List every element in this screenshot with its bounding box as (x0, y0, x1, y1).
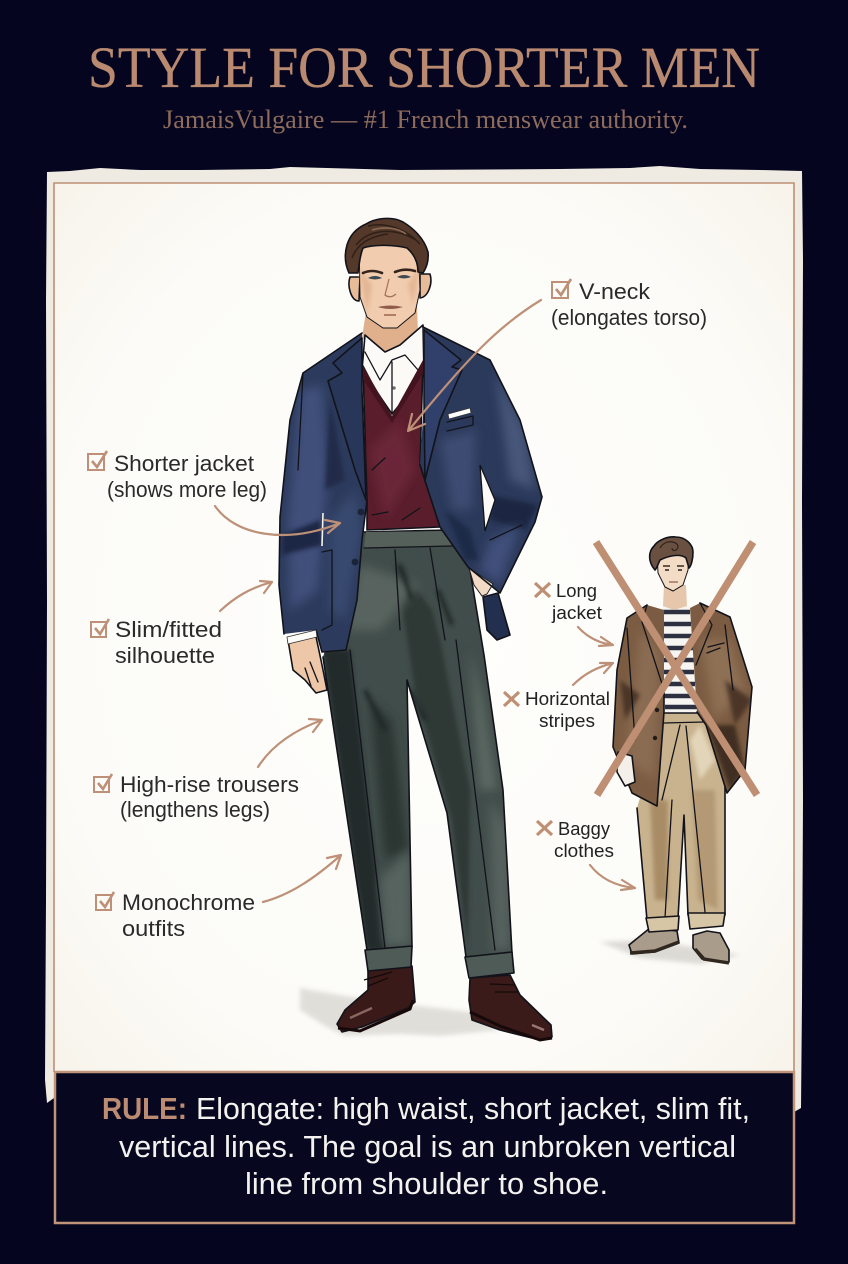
brown long coat (613, 603, 752, 806)
annotation: Monochrome outfits: Monochrome (122, 890, 255, 915)
annotation: Slim/fitted: Slim/fitted (115, 617, 222, 642)
rule text: Elongate: high waist, short jacket, slim fit, (196, 1091, 750, 1126)
annotation: Long jacket: jacket (551, 602, 602, 623)
annotation: High-rise trousers (94, 719, 322, 822)
rule text: RULE: (102, 1091, 187, 1126)
paper inner frame (54, 183, 794, 1072)
annotation: High-rise trousers: High-rise trousers (120, 772, 299, 797)
khaki trousers (637, 713, 725, 932)
arrow (263, 855, 341, 902)
arrow (215, 506, 340, 535)
gap between arm and body (480, 465, 495, 531)
neck and head (345, 218, 431, 365)
arrow (408, 300, 541, 431)
big cross-out X (596, 542, 757, 795)
annotation: High-rise trousers: (lengthens legs) (120, 797, 270, 822)
left shoe (337, 966, 415, 1032)
striped shirt (663, 606, 697, 712)
title: STYLE FOR SHORTER MEN (88, 35, 760, 100)
small figure: poorly dressed man (596, 537, 757, 964)
annotation: Long jacket (535, 580, 613, 646)
rule text: line from shoulder to shoe. (245, 1166, 608, 1201)
lapels (328, 338, 366, 500)
annotation: Horizontal stripes: stripes (539, 710, 595, 731)
sleeve seams (298, 373, 522, 630)
annotation: Long jacket: Long (556, 580, 597, 601)
shirt cuff and hand at pocket (469, 568, 493, 596)
small figure hand (617, 752, 635, 786)
annotation: Shorter jacket: Shorter jacket (114, 451, 255, 476)
arrow (220, 581, 272, 611)
annotation: Horizontal stripes (504, 663, 613, 731)
annotation: V-neck: V-neck (579, 279, 651, 304)
pocket square (448, 408, 471, 419)
annotation: Baggy clothes: Baggy (558, 818, 611, 839)
annotation: Monochrome outfits (96, 855, 341, 941)
blazer right side and sleeve (420, 327, 542, 593)
annotation: Horizontal stripes: Horizontal (525, 688, 610, 709)
annotation: Shorter jacket (88, 451, 340, 535)
annotation: Baggy clothes: clothes (554, 840, 614, 861)
small figure shoes (629, 928, 729, 963)
arrow (573, 663, 613, 685)
rule text: vertical lines. The goal is an unbroken vertical (119, 1129, 736, 1164)
panel: torn paper (45, 166, 803, 1112)
facial features (363, 270, 415, 273)
annotation: Slim/fitted (91, 581, 272, 668)
small figure head (650, 537, 693, 610)
trousers (323, 530, 514, 978)
subtitle: JamaisVulgaire — #1 French menswear authority. (163, 105, 688, 134)
ears (349, 274, 431, 301)
navy blazer (279, 327, 542, 652)
panel: rule (55, 1072, 794, 1223)
face (359, 240, 420, 328)
left hand and cuff (287, 630, 327, 693)
small figure shadow (600, 940, 740, 964)
blazer left side and sleeve (279, 333, 367, 652)
arrow (258, 719, 322, 767)
annotation: V-neck: (elongates torso) (551, 305, 707, 330)
annotation: V-neck (408, 279, 707, 431)
annotation: Baggy clothes (537, 818, 635, 890)
right shoe (469, 975, 552, 1040)
hair (345, 218, 428, 273)
trouser cuffs (365, 946, 412, 971)
white shirt (362, 325, 424, 414)
blazer buttons (358, 509, 364, 515)
annotation: Monochrome outfits: outfits (122, 916, 185, 941)
arrow (590, 865, 635, 890)
arrow (578, 627, 613, 646)
checkbox icon (552, 279, 571, 298)
burgundy v-neck sweater (362, 360, 440, 530)
blazer lower flap (483, 593, 510, 640)
waistband and pleats (364, 531, 452, 548)
annotation: Slim/fitted: silhouette (115, 643, 215, 668)
ground shadow (300, 988, 500, 1036)
annotation: Shorter jacket: (shows more leg) (107, 477, 267, 502)
main figure: well-dressed man (279, 218, 552, 1040)
